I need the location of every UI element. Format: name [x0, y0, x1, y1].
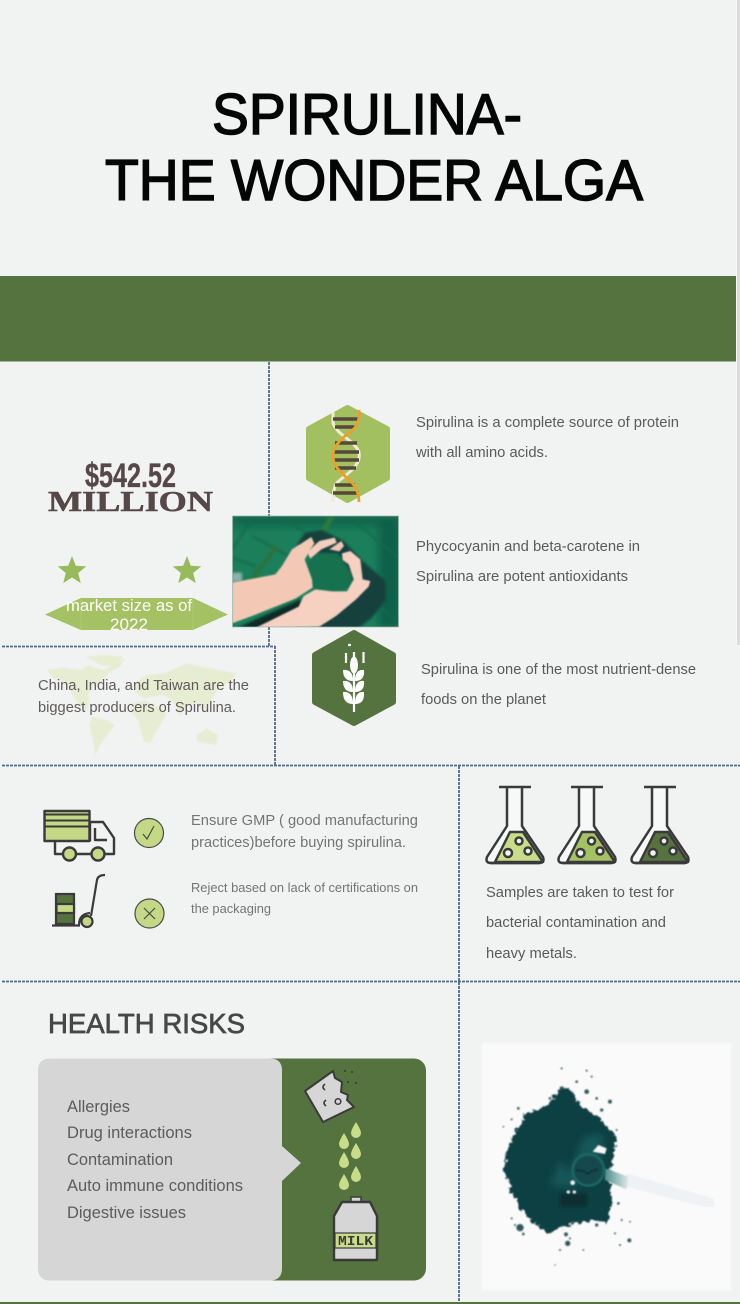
risk list: Drug interactions: [67, 1124, 192, 1142]
icon: left star: [58, 556, 86, 583]
panel: market size: [45, 457, 228, 634]
flask dark: [632, 787, 688, 863]
icon: milk drops: [339, 1122, 361, 1190]
grey list panel: [38, 1058, 301, 1280]
text: protein: [415, 415, 679, 461]
icon: milk bottle: MILK: [338, 1234, 374, 1250]
icon: right star: [173, 556, 201, 583]
world map: [47, 655, 237, 757]
text: GMP: Ensure GMP ( good manufacturing: [191, 813, 418, 829]
icon: hand cart with barrels: [52, 875, 105, 927]
text: protein: Spirulina is a complete source of protein: [416, 415, 679, 431]
market value figure: $542.52: [85, 457, 176, 495]
icon: milk bottle: [334, 1197, 377, 1260]
photo border: [232, 516, 398, 627]
risk list: Digestive issues: [67, 1204, 186, 1222]
title: THE WONDER ALGA: [105, 149, 644, 213]
photo: spirulina powder with scoop: [482, 1043, 731, 1290]
dashed panel dividers: [2, 362, 740, 1304]
text: producers: [38, 678, 249, 716]
text: nutrient-dense: [421, 662, 696, 708]
heading: health risks: HEALTH RISKS: [48, 1008, 245, 1039]
text: nutrient-dense: foods on the planet: [421, 692, 546, 708]
icon: cracker: [305, 1070, 357, 1122]
icon: flasks: [486, 787, 688, 863]
text: samples: heavy metals.: [486, 946, 577, 962]
risk list: [67, 1098, 243, 1222]
title: [105, 83, 644, 213]
icon: truck: [44, 811, 114, 860]
icon: cross badge: [135, 899, 164, 928]
ribbon text: market size as of: [66, 596, 192, 615]
panel: health risks card: [38, 1058, 426, 1280]
text: antioxidants: [416, 539, 640, 585]
text: certifications: the packaging: [191, 901, 271, 916]
icon: DNA hexagon: [309, 408, 387, 502]
ribbon: [45, 598, 228, 630]
million label: MILLION: [48, 487, 213, 518]
text: antioxidants: Phycocyanin and beta-carotene in: [416, 539, 640, 555]
risk list: Auto immune conditions: [67, 1177, 243, 1195]
flask mid: [558, 787, 616, 863]
green panel: [190, 1058, 426, 1280]
text: producers: biggest producers of Spirulina.: [38, 700, 236, 716]
green banner: [0, 276, 736, 362]
text: protein: with all amino acids.: [415, 445, 548, 461]
icon: wheat hexagon: [315, 633, 393, 723]
icon: check badge: [134, 818, 164, 848]
risk list: Contamination: [67, 1151, 173, 1169]
ribbon text: 2022: [110, 615, 148, 634]
text: antioxidants: Spirulina are potent antioxidants: [416, 569, 628, 585]
ribbon text: [66, 596, 192, 634]
risk list: Allergies: [67, 1098, 130, 1116]
flask light: [486, 787, 544, 863]
text: samples: bacterial contamination and: [486, 915, 666, 931]
text: GMP: [191, 813, 418, 851]
text: GMP: practices)before buying spirulina.: [191, 835, 406, 851]
text: samples: Samples are taken to test for: [486, 885, 674, 901]
text: certifications: Reject based on lack of certifications on: [191, 880, 418, 895]
text: producers: China, India, and Taiwan are the: [38, 678, 249, 694]
text: nutrient-dense: Spirulina is one of the most nutrient-dense: [421, 662, 696, 678]
text: samples: [486, 885, 674, 962]
photo: hands holding spirulina: [232, 516, 400, 628]
text: certifications: [191, 880, 418, 916]
title: SPIRULINA-: [212, 83, 522, 147]
